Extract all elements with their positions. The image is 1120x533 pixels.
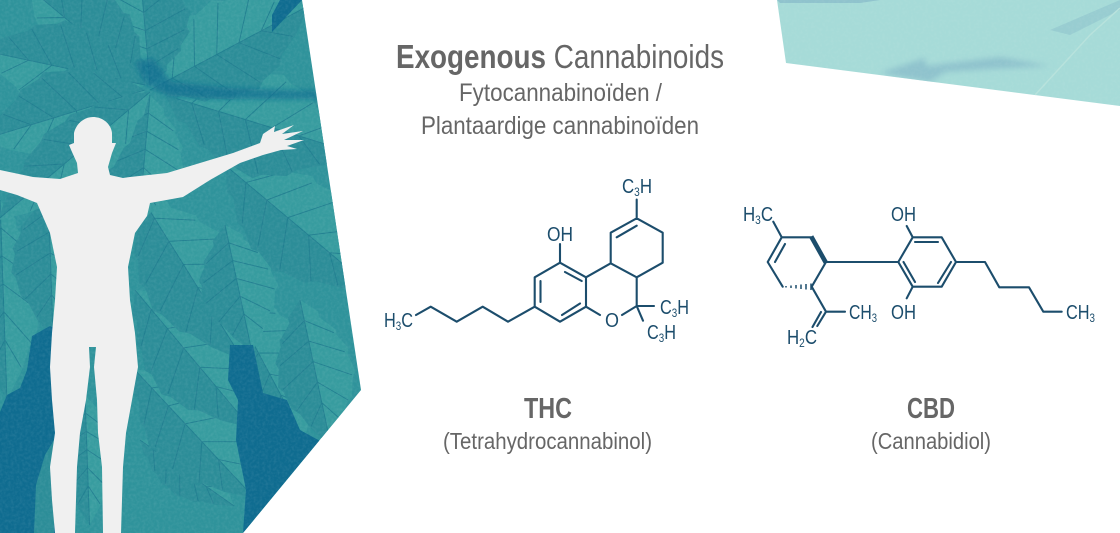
CBD molecule: 3	[1090, 311, 1095, 325]
THC label: THC	[524, 393, 572, 425]
THC molecule: H	[664, 322, 676, 344]
dark gap: left of figure	[0, 326, 58, 533]
CBD label: CBD	[907, 393, 955, 425]
CBD molecule: CH	[1066, 302, 1095, 324]
CBD molecule: H	[743, 204, 757, 226]
CBD molecule	[743, 204, 1095, 350]
human silhouette	[0, 117, 304, 533]
THC molecule: C	[660, 297, 674, 319]
subtitle line 1: Fytocannabinoïden /	[459, 79, 662, 107]
title: Exogenous Cannabinoids	[396, 38, 724, 75]
THC molecule: 3	[634, 185, 640, 199]
panel: left leaf photo	[0, 0, 361, 533]
THC full name: (Tetrahydrocannabinol)	[443, 428, 652, 454]
THC molecule: H	[677, 297, 689, 319]
THC molecule: 3	[672, 306, 677, 320]
THC molecule: OH	[547, 224, 573, 246]
dark gap: right of leaves	[228, 345, 322, 533]
THC molecule: C	[622, 176, 636, 198]
CBD molecule: 3	[872, 311, 877, 325]
THC molecule: 3	[659, 331, 664, 345]
dark centre shadows	[135, 58, 318, 99]
THC molecule: H	[640, 176, 652, 198]
THC molecule: C	[401, 310, 413, 332]
subtitle line 2: Plantaardige cannabinoïden	[421, 112, 699, 140]
CBD molecule: 3	[755, 213, 761, 227]
CBD molecule: CH	[849, 302, 878, 324]
CBD molecule: H	[787, 327, 801, 349]
THC molecule: C	[647, 322, 661, 344]
THC molecule	[384, 176, 689, 345]
panel: top right leaf photo	[770, 0, 1120, 110]
THC molecule: O	[605, 310, 619, 332]
CBD molecule: OH	[891, 204, 916, 226]
THC molecule: H	[384, 310, 398, 332]
CBD full name: (Cannabidiol)	[871, 428, 991, 454]
CBD molecule: C	[761, 204, 773, 226]
CBD molecule: OH	[891, 302, 916, 324]
THC molecule: 3	[396, 319, 401, 333]
CBD molecule: 2	[799, 336, 805, 350]
CBD molecule: C	[805, 327, 817, 349]
